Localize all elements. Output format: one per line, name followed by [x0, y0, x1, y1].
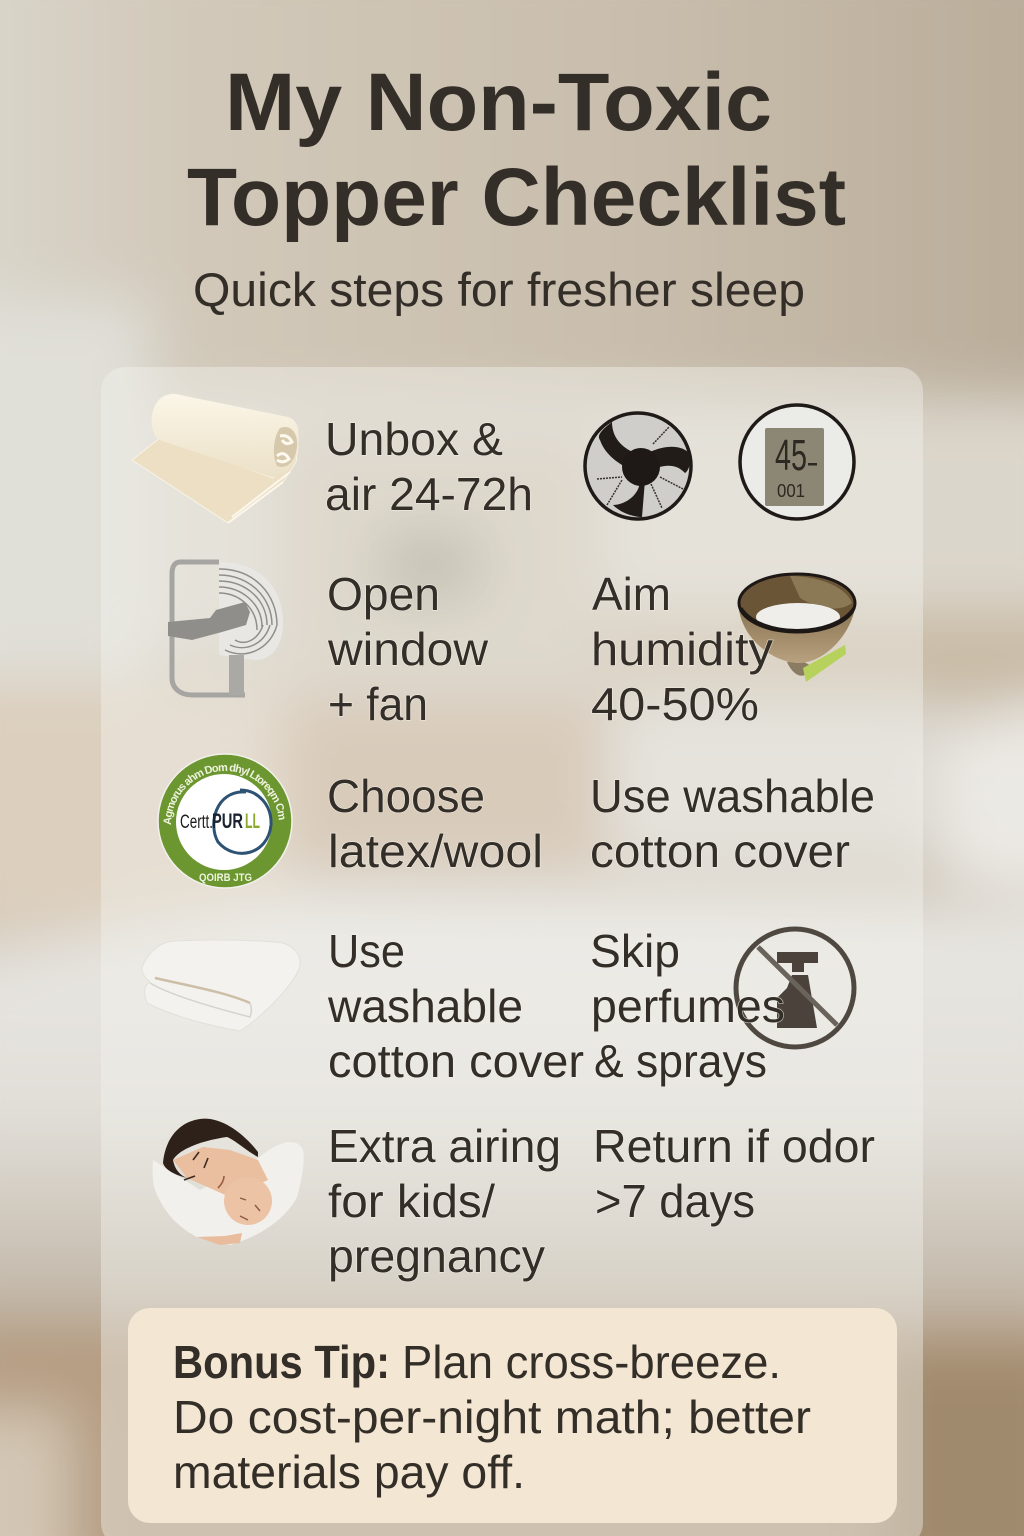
- icon: certification badge: [157, 753, 293, 889]
- step: cotton cover: washable: [327, 980, 523, 1032]
- callout: bonus tip: [128, 1308, 897, 1523]
- step: skip perfumes: Skip: [590, 925, 680, 977]
- step: aim humidity: [591, 568, 773, 730]
- step: aim humidity: 40-50%: [591, 678, 759, 730]
- step: washable cover: Use washable: [590, 770, 875, 822]
- step: return if odor: >7 days: [595, 1175, 755, 1227]
- step: extra airing: for kids/: [328, 1175, 495, 1227]
- callout: bonus tip: Do cost-per-night math; better: [173, 1391, 811, 1443]
- step: extra airing: [328, 1120, 561, 1282]
- step: choose latex: [327, 770, 543, 877]
- step: unbox: air 24-72h: [325, 468, 533, 520]
- icon: certification badge: PUR: [212, 810, 243, 833]
- icon: hygrometer in circle: 001: [777, 481, 805, 501]
- step: return if odor: [593, 1120, 875, 1227]
- step: cotton cover: cotton cover: [328, 1035, 584, 1087]
- icon: certification badge: QOIRB JTG: [199, 872, 252, 884]
- icon: certification badge: Certt.: [180, 812, 213, 833]
- panel: checklist card: [101, 367, 923, 1536]
- step: open window: [327, 568, 489, 730]
- step: choose latex: latex/wool: [328, 825, 543, 877]
- step: aim humidity: Aim: [592, 568, 671, 620]
- step: skip perfumes: [590, 925, 785, 1087]
- subtitle: Quick steps for fresher sleep: [193, 263, 805, 316]
- callout: bonus tip: Plan cross-breeze.: [402, 1336, 781, 1388]
- icon: no spray: [736, 929, 854, 1047]
- title: My Non-Toxic: [225, 57, 772, 148]
- icon: standing fan: [168, 562, 283, 695]
- icon: rolled topper: [132, 394, 299, 523]
- step: choose latex: Choose: [327, 770, 485, 822]
- icon: mother and baby: [153, 1119, 304, 1245]
- callout: bonus tip: materials pay off.: [173, 1446, 525, 1498]
- icon: folded cotton cover: [142, 940, 300, 1031]
- icon: hygrometer in circle: 45: [775, 431, 807, 480]
- icon: certification badge: Agmorus ahm Dom dhyl Ltoreqm Cm: [164, 764, 284, 825]
- step: washable cover: cotton cover: [590, 825, 850, 877]
- callout: bonus tip: Bonus Tip:: [173, 1336, 390, 1388]
- step: washable cover: [590, 770, 875, 877]
- icon: hygrometer in circle: [740, 405, 854, 519]
- icon: round fan: [585, 413, 691, 519]
- step: aim humidity: humidity: [591, 623, 773, 675]
- step: extra airing: Extra airing: [328, 1120, 561, 1172]
- title: Topper Checklist: [187, 152, 846, 243]
- step: extra airing: pregnancy: [328, 1230, 545, 1282]
- step: return if odor: Return if odor: [593, 1120, 875, 1172]
- step: unbox: [325, 413, 533, 520]
- step: skip perfumes: & sprays: [594, 1035, 767, 1087]
- step: skip perfumes: perfumes: [591, 980, 785, 1032]
- step: unbox: Unbox &: [325, 413, 503, 465]
- step: cotton cover: Use: [328, 925, 405, 977]
- title: [187, 57, 846, 243]
- step: cotton cover: [327, 925, 584, 1087]
- icon: bowl of baking soda: [739, 574, 855, 682]
- icon: certification badge: LL: [245, 810, 260, 833]
- step: open window: Open: [327, 568, 440, 620]
- step: open window: + fan: [328, 678, 428, 730]
- step: open window: window: [327, 623, 489, 675]
